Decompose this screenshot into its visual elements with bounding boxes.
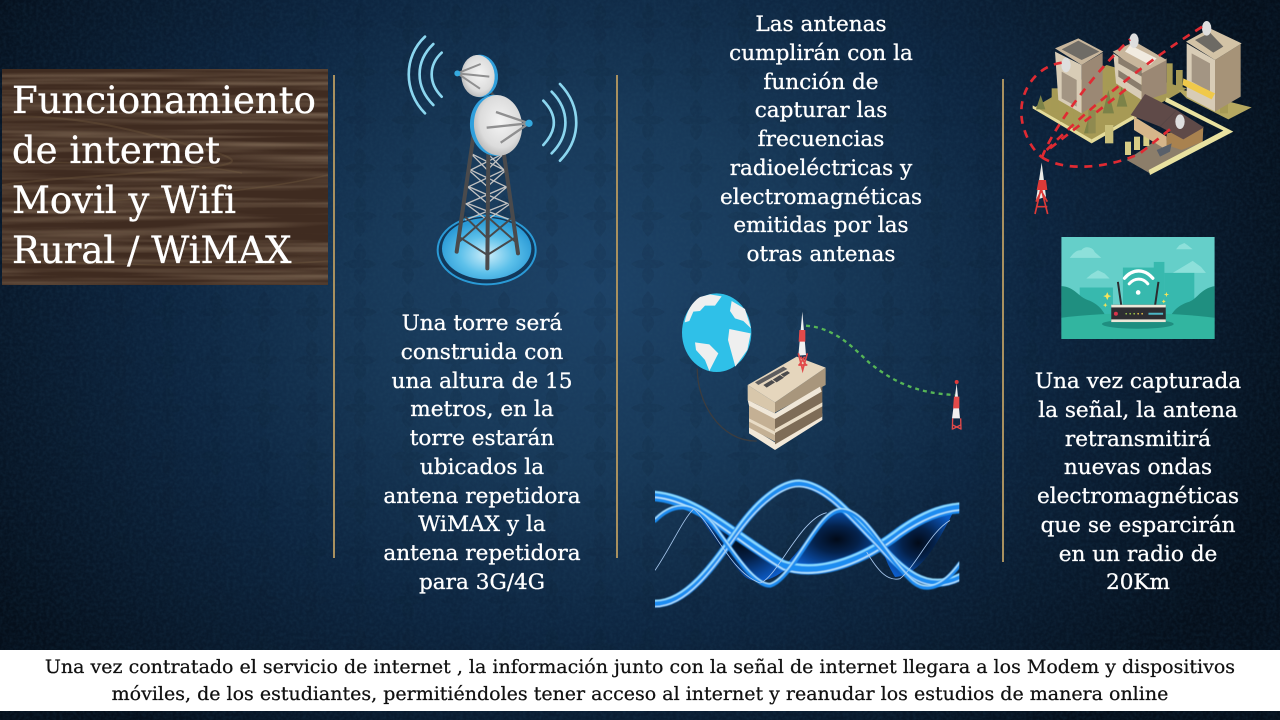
lattice — [465, 153, 511, 220]
antennas on roofs — [1061, 21, 1211, 129]
building right — [1183, 28, 1242, 112]
signal waves right — [543, 84, 576, 161]
title: Funcionamiento — [12, 79, 316, 122]
text block: antennas description: emitidas por las — [733, 213, 909, 238]
ground — [1033, 65, 1252, 143]
banner text: Una vez contratado el servicio de internet , la información junto con la señal de internet llegara a los Modem y dispositivos — [45, 656, 1235, 678]
text block: antennas description: frecuencias — [758, 127, 884, 152]
sparkles — [1103, 292, 1169, 307]
title: de internet — [12, 129, 220, 172]
skyline — [1080, 262, 1194, 319]
title: Rural / WiMAX — [12, 229, 291, 272]
text block: tower description: torre estarán — [410, 426, 554, 451]
text block: tower description: antena repetidora — [383, 484, 581, 509]
text block: tower description: una altura de 15 — [392, 369, 572, 394]
wave 3 — [655, 505, 960, 587]
image: wifi router scene — [1061, 237, 1215, 339]
text block: tower description: WiMAX y la — [418, 512, 546, 537]
large dish — [467, 92, 533, 158]
tower legs — [457, 137, 518, 268]
base disc — [437, 215, 537, 285]
title — [12, 79, 316, 272]
signal waves left — [409, 37, 442, 113]
green signal path — [806, 326, 955, 395]
text block: antennas description: electromagnéticas — [720, 185, 922, 210]
wood texture — [2, 69, 328, 285]
router — [1111, 282, 1166, 322]
text block: retransmission description: nuevas ondas — [1064, 455, 1212, 480]
text block: antennas description: capturar las — [755, 98, 887, 123]
wave 2 — [655, 481, 960, 607]
text block: antennas description — [720, 12, 922, 267]
trees — [1036, 63, 1228, 155]
cable — [697, 368, 757, 441]
text block: tower description: ubicados la — [420, 455, 544, 480]
divider: third column — [1002, 79, 1004, 562]
blue fill areas — [700, 517, 784, 581]
divider: second column — [616, 75, 618, 558]
divider: first column — [333, 75, 335, 558]
image: blue electromagnetic waves — [655, 478, 960, 608]
small dish — [454, 53, 499, 99]
text block: retransmission description: Una vez capturada — [1035, 369, 1241, 394]
small antenna — [952, 380, 961, 430]
wifi symbol — [1125, 271, 1153, 295]
text block: tower description: Una torre será — [402, 311, 562, 336]
wave 1 — [655, 492, 960, 573]
title: Movil y Wifi — [12, 179, 236, 222]
road — [1127, 97, 1233, 175]
text block: tower description: antena repetidora — [383, 541, 581, 566]
thin lines — [655, 509, 950, 583]
icon: globe, data center and antennas — [682, 293, 962, 450]
text block: tower description: para 3G/4G — [419, 570, 545, 595]
illustration: city with antennas and dashed links — [1020, 21, 1252, 214]
banner text: móviles, de los estudiantes, permitiéndoles tener acceso al internet y reanudar los estudios de manera online — [112, 683, 1168, 705]
text block: antennas description: Las antenas — [755, 12, 887, 37]
text block: retransmission description: que se esparcirán — [1040, 513, 1236, 538]
text block: antennas description: cumplirán con la — [729, 41, 913, 66]
lawn — [1061, 313, 1215, 339]
red dashed links — [1021, 26, 1203, 167]
text block: antennas description: otras antenas — [747, 242, 895, 267]
house — [1131, 94, 1204, 157]
text block: retransmission description: en un radio de — [1059, 542, 1217, 567]
clouds — [1070, 243, 1206, 279]
banner text — [45, 656, 1235, 705]
small red and white tower — [1035, 163, 1048, 214]
text block: antennas description: función de — [763, 70, 879, 95]
hills — [1061, 286, 1215, 318]
building left — [1055, 38, 1103, 113]
building center — [1113, 42, 1167, 102]
bottom banner — [0, 650, 1280, 711]
text block: tower description — [383, 311, 581, 595]
text block: retransmission description: 20Km — [1106, 570, 1170, 595]
text block: retransmission description: retransmitirá — [1065, 427, 1211, 452]
globe — [682, 293, 751, 372]
text block: retransmission description — [1035, 369, 1241, 595]
text block: tower description: metros, en la — [410, 397, 554, 422]
icon: transmission tower with two dishes — [407, 35, 578, 286]
data center building — [748, 357, 826, 450]
panel: wood title board — [2, 69, 328, 285]
text block: tower description: construida con — [401, 340, 563, 365]
text block: retransmission description: la señal, la antena — [1038, 398, 1238, 423]
large antenna — [798, 312, 807, 370]
text block: antennas description: radioeléctricas y — [730, 156, 912, 181]
text block: retransmission description: electromagnéticas — [1037, 484, 1239, 509]
